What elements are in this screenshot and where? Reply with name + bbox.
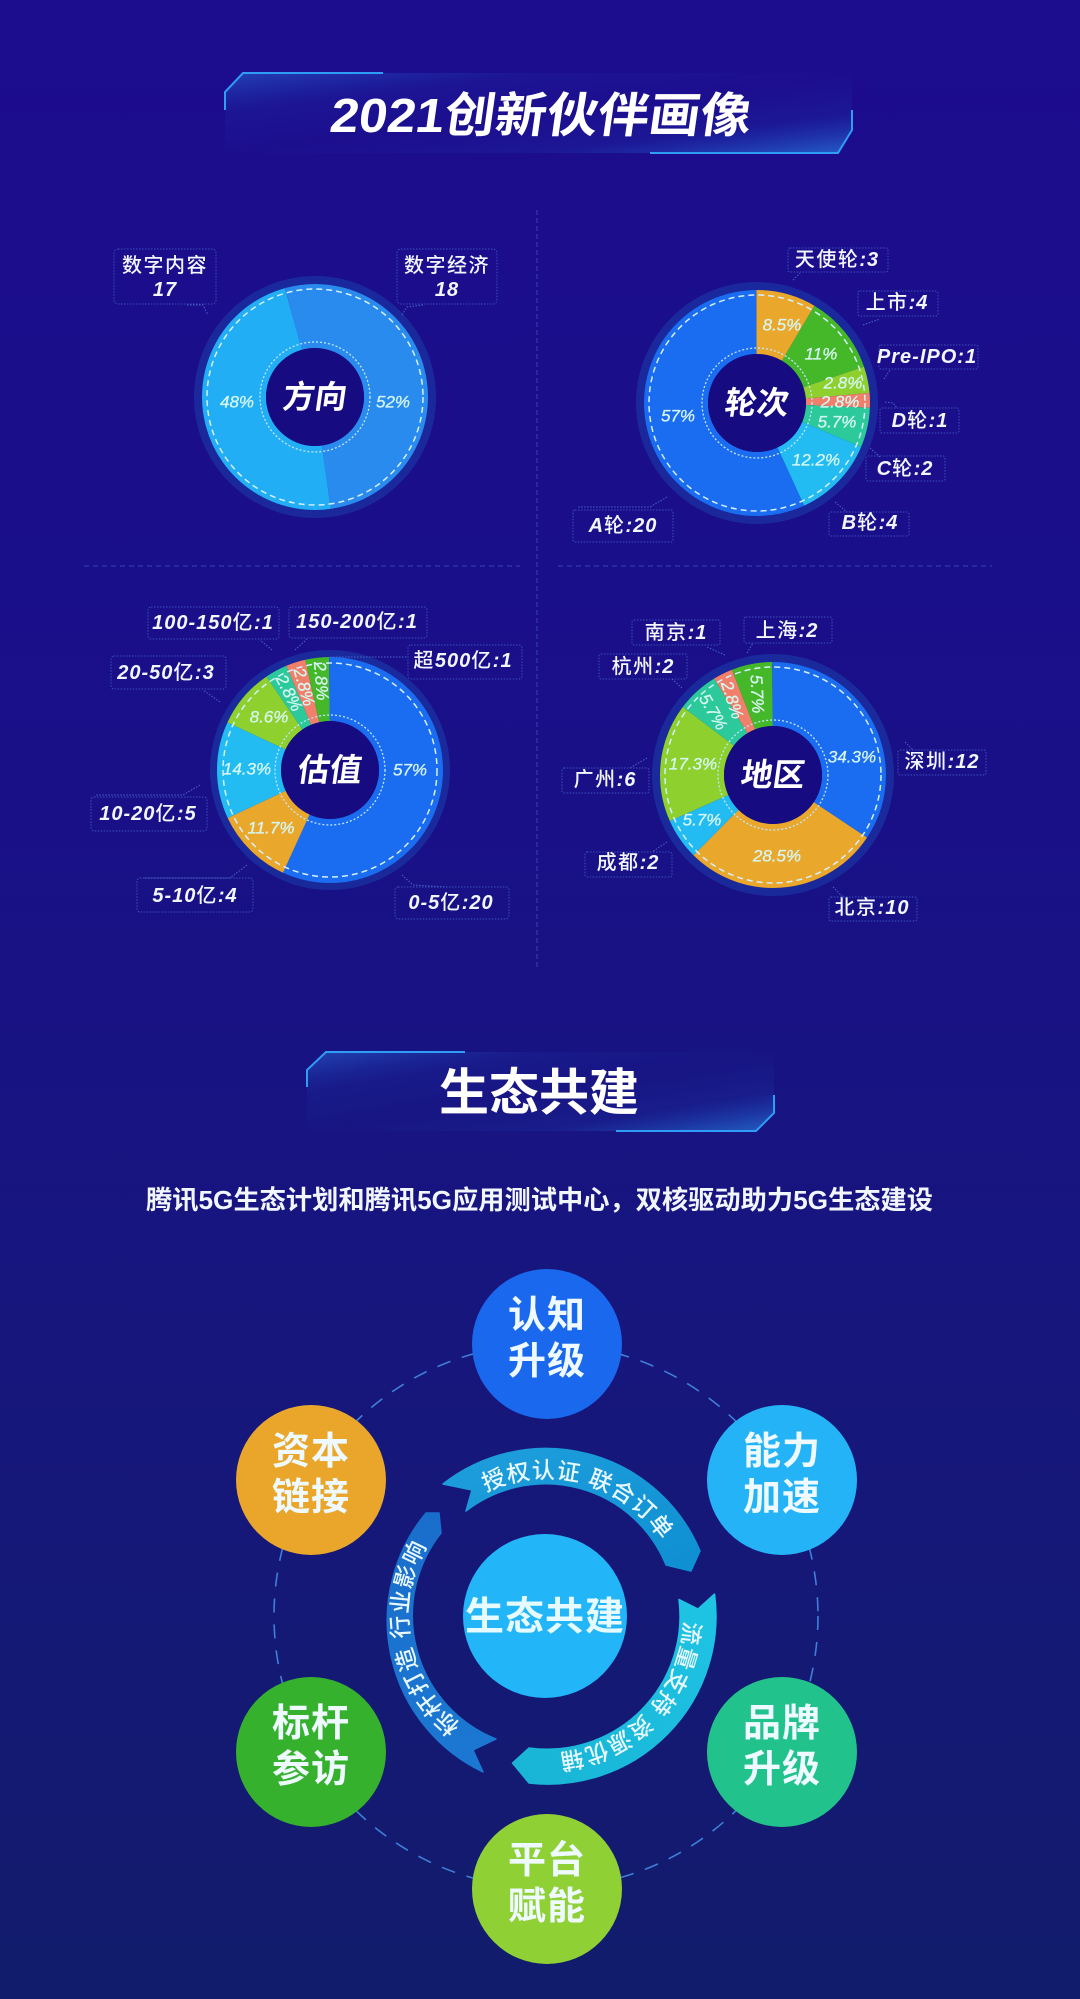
label Pre-IPO:1 xyxy=(877,345,978,379)
label 广州:6: 广州:6 xyxy=(574,768,636,791)
node: 认知升级: 认知 xyxy=(508,1295,586,1337)
percent labels: 估值: 11.7% xyxy=(248,818,294,838)
node: 资本链接 xyxy=(236,1405,386,1555)
title banner: 2021创新伙伴画像 xyxy=(225,73,852,153)
center circle: 生态共建: 生态共建 xyxy=(465,1596,625,1639)
label 数字经济 18: 18 xyxy=(435,279,459,301)
panel: 估值 donut xyxy=(91,607,522,919)
node: 能力加速 xyxy=(707,1405,857,1555)
center label 轮次: 轮次 xyxy=(722,385,792,421)
diagram: 生态共建 cycle xyxy=(236,1269,857,1964)
label D轮:1: D轮:1 xyxy=(892,409,948,432)
label A轮:20 xyxy=(573,497,673,542)
donut slices: 方向 xyxy=(216,298,414,496)
percent labels: 估值: 2.8% xyxy=(271,671,306,715)
label 杭州:2 xyxy=(599,654,687,688)
label 天使轮:3: 天使轮:3 xyxy=(795,248,879,271)
label 5-10亿:4: 5-10亿:4 xyxy=(152,884,238,907)
label 南京:1: 南京:1 xyxy=(645,621,707,644)
label 100-150亿:1 xyxy=(148,607,279,650)
node: 平台赋能: 平台 xyxy=(508,1840,586,1882)
percent labels: 轮次: 5.7% xyxy=(818,412,856,432)
percent labels: 地区: 5.7% xyxy=(746,674,768,714)
label 深圳:12: 深圳:12 xyxy=(905,750,979,773)
donut slices: 估值 xyxy=(249,689,411,851)
label 20-50亿:3: 20-50亿:3 xyxy=(116,661,215,684)
label 数字内容 17 xyxy=(114,249,216,315)
arrow: 标杆打造 行业影响 xyxy=(386,1512,497,1773)
node: 平台赋能: 赋能 xyxy=(508,1886,586,1928)
node: 认知升级 xyxy=(472,1269,622,1419)
label 10-20亿:5 xyxy=(91,785,207,831)
percent labels: 轮次 xyxy=(661,316,862,470)
percent labels: 地区: 17.3% xyxy=(669,754,717,774)
label 0-5亿:20 xyxy=(395,875,509,919)
label 成都:2: 成都:2 xyxy=(597,851,659,874)
label 北京:10: 北京:10 xyxy=(835,896,909,919)
percent labels: 估值: 8.6% xyxy=(250,708,288,726)
percent labels: 轮次: 8.5% xyxy=(763,316,801,334)
percent labels: 轮次: 12.2% xyxy=(792,450,840,470)
arrow: 流量支持 资源优辅: 流量支持 资源优辅 xyxy=(561,1622,704,1772)
node: 品牌升级: 升级 xyxy=(743,1749,821,1791)
label B轮:4: B轮:4 xyxy=(842,511,898,534)
percent labels: 地区: 28.5% xyxy=(752,846,801,866)
label 南京:1 xyxy=(632,620,725,655)
node: 认知升级: 升级 xyxy=(508,1341,586,1383)
center label 方向: 方向 xyxy=(280,379,350,415)
percent labels: 地区: 5.7% xyxy=(695,690,731,734)
percent labels: 地区 xyxy=(669,674,876,866)
label 数字内容 17: 17 xyxy=(153,279,177,301)
panel: 方向 donut xyxy=(114,249,497,514)
donut slices: 轮次 xyxy=(676,322,838,484)
percent labels: 估值: 14.3% xyxy=(223,760,271,778)
label 100-150亿:1: 100-150亿:1 xyxy=(152,611,274,634)
section banner: 生态共建 xyxy=(307,1052,774,1131)
percent labels: 估值: 2.8% xyxy=(289,665,318,708)
node: 品牌升级: 品牌 xyxy=(743,1703,821,1745)
percent labels: 估值: 2.8% xyxy=(310,660,332,701)
label 超500亿:1 xyxy=(330,645,522,679)
label 成都:2 xyxy=(585,842,672,877)
section heading: 生态共建 xyxy=(439,1065,639,1121)
label 5-10亿:4 xyxy=(137,865,253,912)
percent labels: 轮次: 2.8% xyxy=(823,374,862,392)
node: 资本链接: 资本 xyxy=(272,1431,350,1473)
label 上市:4: 上市:4 xyxy=(866,291,928,314)
label 天使轮:3 xyxy=(788,248,888,280)
percent labels: 估值: 57% xyxy=(393,760,427,780)
label 北京:10 xyxy=(829,887,917,921)
node: 资本链接: 链接 xyxy=(272,1477,350,1519)
percent labels: 轮次: 2.8% xyxy=(820,392,859,412)
percent labels: 地区: 34.3% xyxy=(828,748,876,766)
percent labels: 地区: 5.7% xyxy=(683,810,721,830)
donut slices: 地区 xyxy=(692,694,854,856)
node: 能力加速: 能力 xyxy=(743,1431,821,1473)
label C轮:2: C轮:2 xyxy=(877,457,933,480)
label 上海:2: 上海:2 xyxy=(756,619,818,642)
label A轮:20: A轮:20 xyxy=(588,514,657,537)
arrow: 标杆打造 行业影响: 标杆打造 行业影响 xyxy=(389,1540,459,1737)
percent labels: 地区: 2.8% xyxy=(717,678,747,721)
panel: 轮次 donut xyxy=(573,248,978,542)
label 0-5亿:20: 0-5亿:20 xyxy=(408,891,494,914)
label 广州:6 xyxy=(562,758,649,793)
node: 品牌升级 xyxy=(707,1677,857,1827)
percent labels: 轮次: 57% xyxy=(661,406,695,426)
label 150-200亿:1: 150-200亿:1 xyxy=(296,610,418,633)
subtitle text: 腾讯5G生态计划和腾讯5G应用测试中心，双核驱动助力5G生态建设 xyxy=(146,1185,933,1215)
center label 估值: 估值 xyxy=(295,752,365,788)
arrow: 流量支持 资源优辅 xyxy=(512,1593,717,1785)
label 20-50亿:3 xyxy=(111,656,226,702)
title: 2021创新伙伴画像 xyxy=(327,89,756,143)
percent labels: 轮次: 11% xyxy=(805,344,837,364)
center label 地区: 地区 xyxy=(738,757,808,793)
percent 48%: 48% xyxy=(220,392,254,412)
label 数字内容 17: 数字内容 xyxy=(122,254,208,277)
label 10-20亿:5: 10-20亿:5 xyxy=(99,802,197,825)
node: 能力加速: 加速 xyxy=(743,1477,821,1519)
label 150-200亿:1 xyxy=(289,607,427,650)
panel: 地区 donut xyxy=(562,617,986,921)
percent labels: 估值 xyxy=(223,660,427,838)
center circle: 生态共建 xyxy=(463,1534,627,1698)
node: 标杆参访 xyxy=(236,1677,386,1827)
label 上海:2 xyxy=(744,617,832,653)
node: 标杆参访: 标杆 xyxy=(272,1703,350,1745)
node: 标杆参访: 参访 xyxy=(272,1749,350,1791)
label C轮:2 xyxy=(866,448,945,481)
label D轮:1 xyxy=(880,402,959,433)
label 超500亿:1: 超500亿:1 xyxy=(413,649,513,672)
node: 平台赋能 xyxy=(472,1814,622,1964)
percent 52%: 52% xyxy=(376,392,410,412)
label Pre-IPO:1: Pre-IPO:1 xyxy=(877,346,977,368)
label 数字经济 18 xyxy=(397,249,497,315)
label B轮:4 xyxy=(829,502,909,536)
label 深圳:12 xyxy=(898,742,986,775)
label 数字经济 18: 数字经济 xyxy=(404,254,490,277)
arrow: 授权认证 联合订单: 授权认证 联合订单 xyxy=(481,1458,674,1538)
label 上市:4 xyxy=(858,291,938,325)
arrow: 授权认证 联合订单 xyxy=(442,1448,701,1572)
label 杭州:2: 杭州:2 xyxy=(612,655,674,678)
